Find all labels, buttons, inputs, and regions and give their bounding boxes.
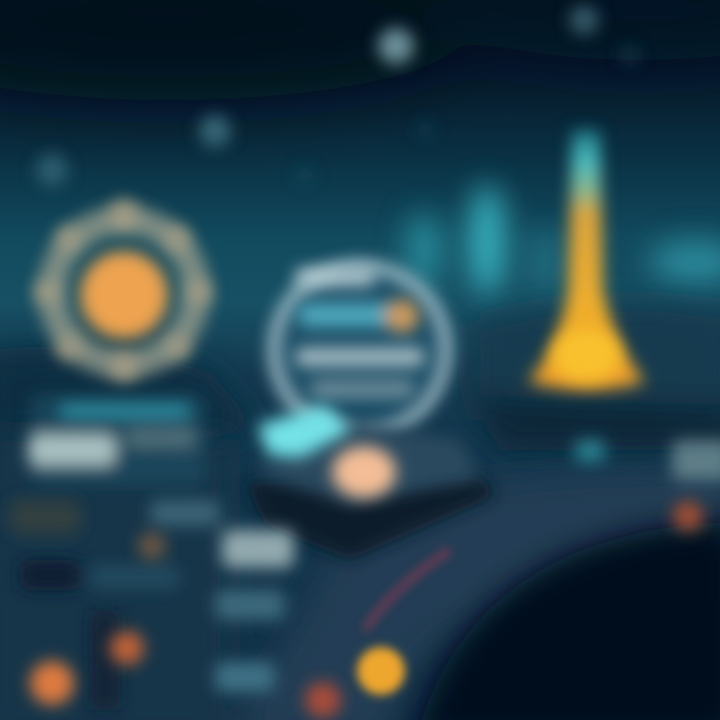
distant hills — [0, 301, 720, 470]
dark foreground crater — [415, 522, 720, 720]
globe outline — [274, 266, 446, 434]
globe interior — [275, 268, 445, 432]
network tiles — [10, 500, 294, 710]
orange node three — [138, 532, 166, 560]
foreground ground tone — [0, 430, 720, 720]
laptop platform — [245, 405, 497, 560]
icon: golden rocket tower — [528, 130, 645, 390]
distant glowing spires — [406, 184, 720, 298]
orange node one — [30, 661, 74, 705]
platform shadow — [245, 476, 497, 560]
orange node two — [110, 631, 144, 665]
red trail — [365, 550, 450, 630]
left data cards — [28, 395, 205, 485]
orange glow — [332, 446, 396, 498]
orange node four — [305, 682, 341, 718]
lower left network nodes — [10, 500, 341, 718]
right machine detail — [575, 440, 720, 531]
yellow node — [357, 647, 405, 695]
globe bands — [295, 268, 425, 398]
dark sky vignette — [0, 0, 720, 100]
icon: central glowing globe — [274, 266, 446, 434]
platform top — [255, 420, 480, 505]
cyan panel — [258, 405, 352, 458]
gear teeth — [34, 199, 212, 382]
icon: sun gear ring — [34, 199, 212, 382]
gear ring — [52, 220, 196, 364]
tower core — [552, 329, 620, 381]
tower body — [528, 130, 645, 390]
yellow node and red trail — [357, 550, 450, 695]
sun core — [80, 251, 168, 339]
stars — [36, 5, 640, 186]
